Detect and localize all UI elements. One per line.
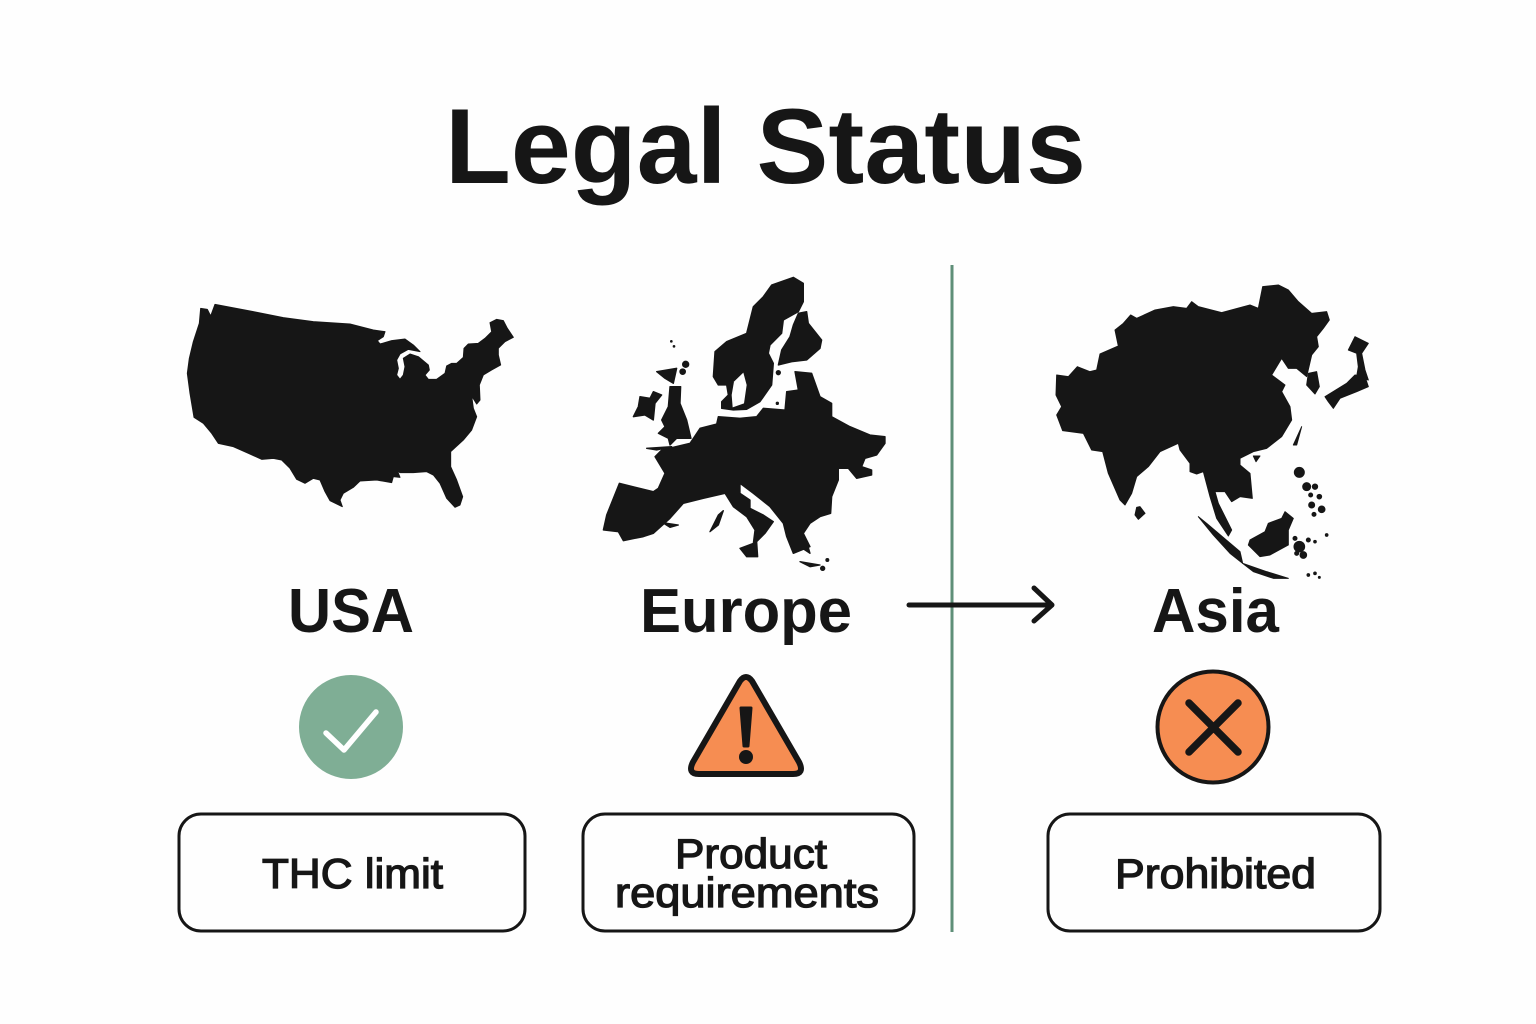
box: Product requirements: Product [675,830,827,877]
box: Prohibited: Prohibited [1115,850,1316,897]
label: Europe: Europe [640,577,852,646]
box: Prohibited [1048,814,1380,931]
map: USA [187,304,513,507]
icon: prohibited [1158,672,1268,782]
icon: check [299,675,403,779]
icon: warning [691,677,801,774]
title: Legal Status [445,86,1086,206]
map: Europe [603,277,885,570]
label: Asia: Asia [1152,577,1279,646]
box: THC limit: THC limit [262,850,443,897]
box: Product requirements [583,814,914,931]
divider line [950,265,954,932]
arrow [909,588,1052,621]
box: THC limit [179,814,525,931]
box: Product requirements: requirements [615,869,879,916]
map: Asia [1056,285,1368,578]
label: USA: USA [288,577,414,646]
